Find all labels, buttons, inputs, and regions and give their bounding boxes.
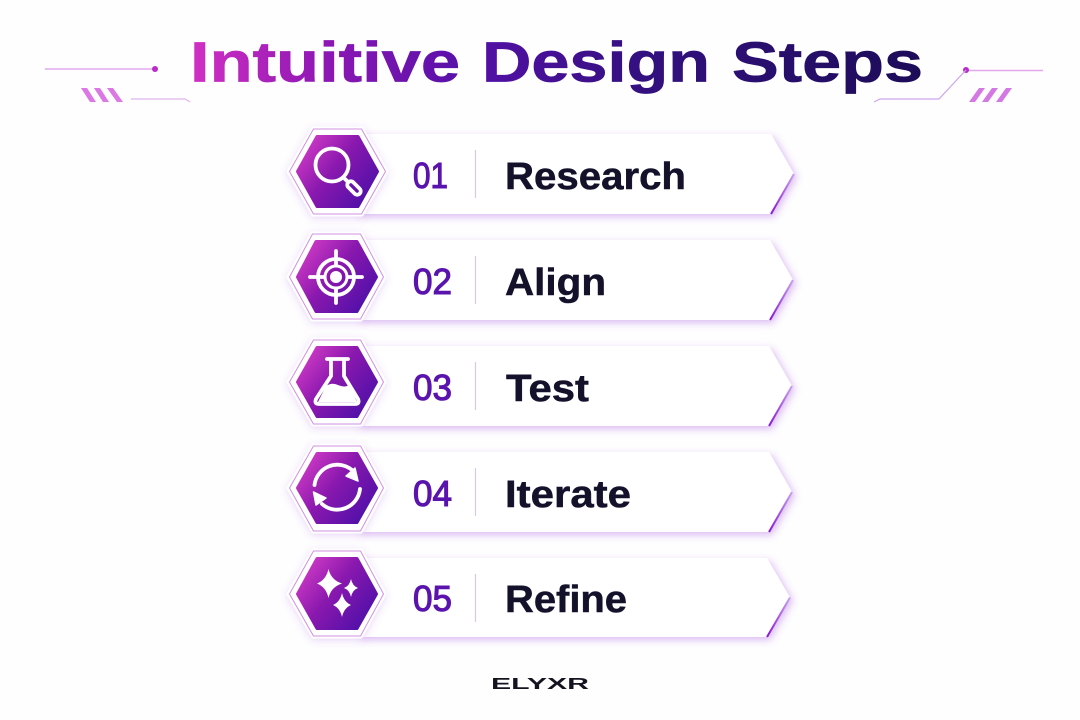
title: Intuitive xyxy=(190,30,460,94)
step 4 number: 04 xyxy=(413,473,452,514)
step 1 label: Research xyxy=(505,156,686,198)
step 5 card xyxy=(358,558,790,637)
right header decoration xyxy=(874,67,1043,102)
step 4 card xyxy=(358,452,792,532)
step 3 number: 03 xyxy=(413,367,452,408)
step 5 hexagon badge xyxy=(288,550,385,637)
icon: flask xyxy=(315,359,359,404)
step 5: Refine xyxy=(288,550,790,637)
step 4 label: Iterate xyxy=(505,474,631,516)
title xyxy=(190,30,923,94)
icon: target xyxy=(310,251,362,303)
step 3 card xyxy=(358,346,792,426)
step 2 number: 02 xyxy=(413,261,452,302)
icon: refresh arrows xyxy=(314,465,360,510)
step 3 hexagon badge xyxy=(288,339,385,425)
left header decoration xyxy=(45,66,190,102)
step 3: Test xyxy=(288,339,792,426)
step 2: Align xyxy=(288,233,793,320)
icon: sparkles xyxy=(317,569,358,617)
step 1: Research xyxy=(288,128,794,215)
step 1 hexagon badge xyxy=(288,128,387,215)
step 5 label: Refine xyxy=(505,579,627,621)
step 4 hexagon badge xyxy=(288,445,385,532)
step 3 label: Test xyxy=(506,368,589,410)
icon: magnifying glass xyxy=(316,148,362,196)
step 1 card xyxy=(358,134,794,214)
step 2 label: Align xyxy=(505,262,606,304)
step 5 number: 05 xyxy=(413,578,452,619)
step 2 card xyxy=(358,240,793,320)
title: Steps xyxy=(732,30,923,94)
step 4: Iterate xyxy=(288,445,792,532)
title: Design xyxy=(482,30,710,94)
logo: ELYXR: ELYXR xyxy=(491,676,590,693)
step 2 hexagon badge xyxy=(288,233,385,320)
step 1 number: 01 xyxy=(413,155,448,196)
